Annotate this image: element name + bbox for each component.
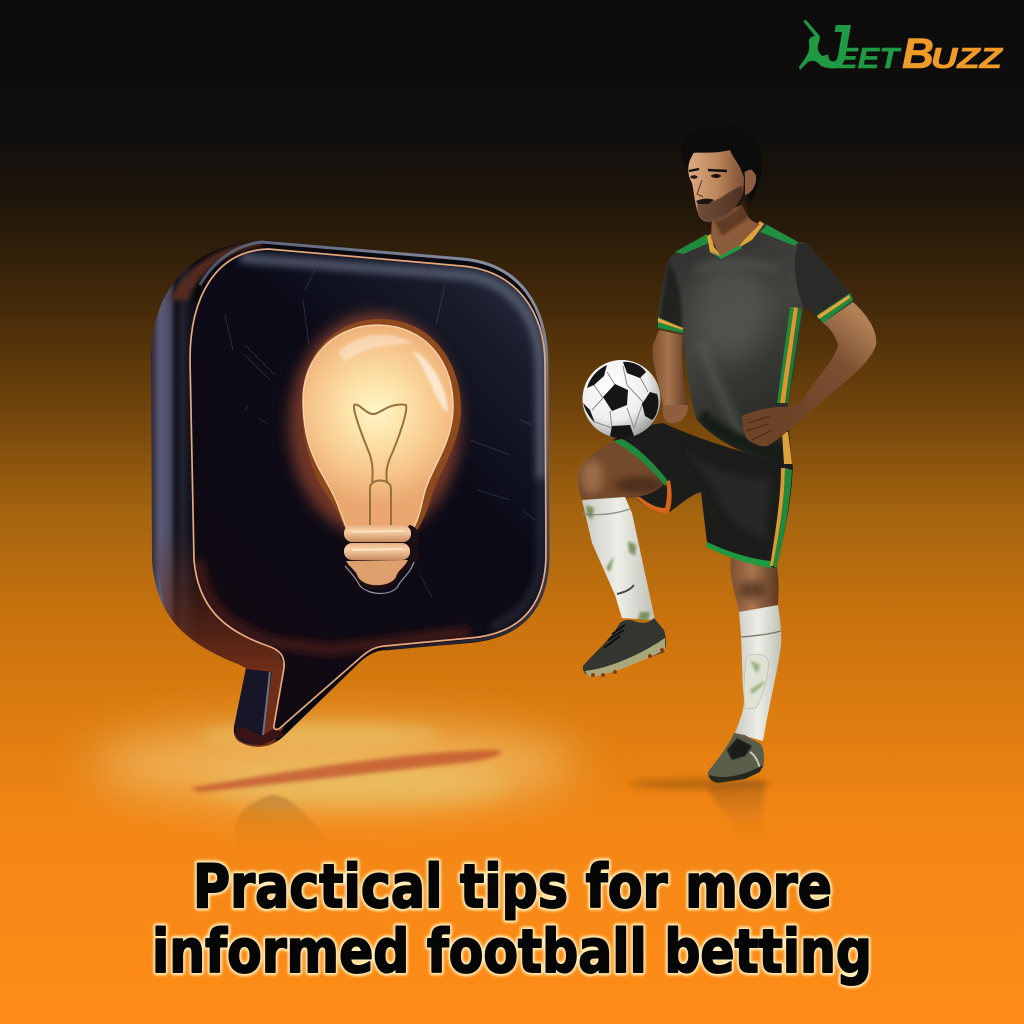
bulb highlights — [338, 335, 448, 412]
logo: JeetBuzz — [799, 13, 1004, 82]
neck — [711, 205, 760, 256]
eyes and brows — [689, 169, 727, 179]
football — [582, 360, 660, 438]
standing boot — [708, 733, 764, 782]
lightbulb copper rim — [302, 319, 461, 532]
logo wordmark: J — [820, 13, 851, 82]
left hand — [663, 405, 688, 423]
shorts side stripes — [770, 468, 785, 566]
right arm — [742, 302, 876, 446]
logo wordmark: EET — [836, 43, 902, 75]
panel: speech bubble with lightbulb — [151, 240, 549, 750]
face edge sheen — [198, 258, 541, 650]
face — [688, 150, 745, 222]
sleeve trim — [817, 293, 853, 323]
bubble rim — [200, 242, 548, 649]
raised thigh — [578, 442, 668, 503]
logo wordmark: B — [902, 30, 934, 78]
jersey — [658, 222, 853, 465]
bubble front face — [191, 250, 546, 729]
shorts green hem — [706, 542, 772, 568]
bubble tail side — [235, 669, 272, 745]
beard — [697, 186, 743, 222]
raised leg sock — [582, 497, 655, 620]
standing sock — [735, 605, 781, 741]
shorts fold shading — [680, 440, 770, 540]
title glow: informed football betting — [152, 917, 872, 987]
bulb screw base — [343, 525, 419, 594]
bubble corner and side tint — [156, 240, 286, 747]
shorts trim green left — [613, 439, 668, 486]
shorts — [613, 423, 793, 568]
ear — [745, 170, 756, 195]
filament — [354, 404, 406, 526]
bubble extruded body — [151, 240, 549, 747]
player shadow on floor — [628, 779, 772, 789]
lightbulb glass — [303, 325, 453, 527]
icon: cricketer silhouette — [799, 20, 829, 70]
left arm — [652, 330, 688, 423]
player reflection — [708, 780, 772, 855]
shoulder and collar trim — [675, 221, 798, 259]
logo wordmark: UZZ — [931, 43, 1004, 75]
copper outline — [190, 249, 546, 729]
nose and mouth — [697, 180, 703, 197]
title line 1: Practical tips for more — [193, 852, 832, 922]
floor glow under speech bubble — [90, 723, 580, 805]
scratches — [225, 270, 535, 597]
hair front — [681, 124, 762, 180]
bulb glow — [289, 313, 461, 537]
title — [152, 852, 872, 987]
jersey side stripes — [777, 307, 794, 403]
title line 2: informed football betting — [152, 917, 872, 987]
title glow: Practical tips for more — [193, 852, 832, 922]
logo wordmark — [820, 13, 1004, 82]
jersey lighting — [660, 243, 852, 465]
hair back — [681, 124, 762, 204]
standing leg — [730, 558, 778, 615]
title glow — [152, 852, 872, 987]
raised boot — [583, 618, 666, 676]
shorts orange trim — [636, 480, 672, 514]
football player — [578, 124, 876, 783]
speech bubble reflection — [235, 795, 336, 855]
